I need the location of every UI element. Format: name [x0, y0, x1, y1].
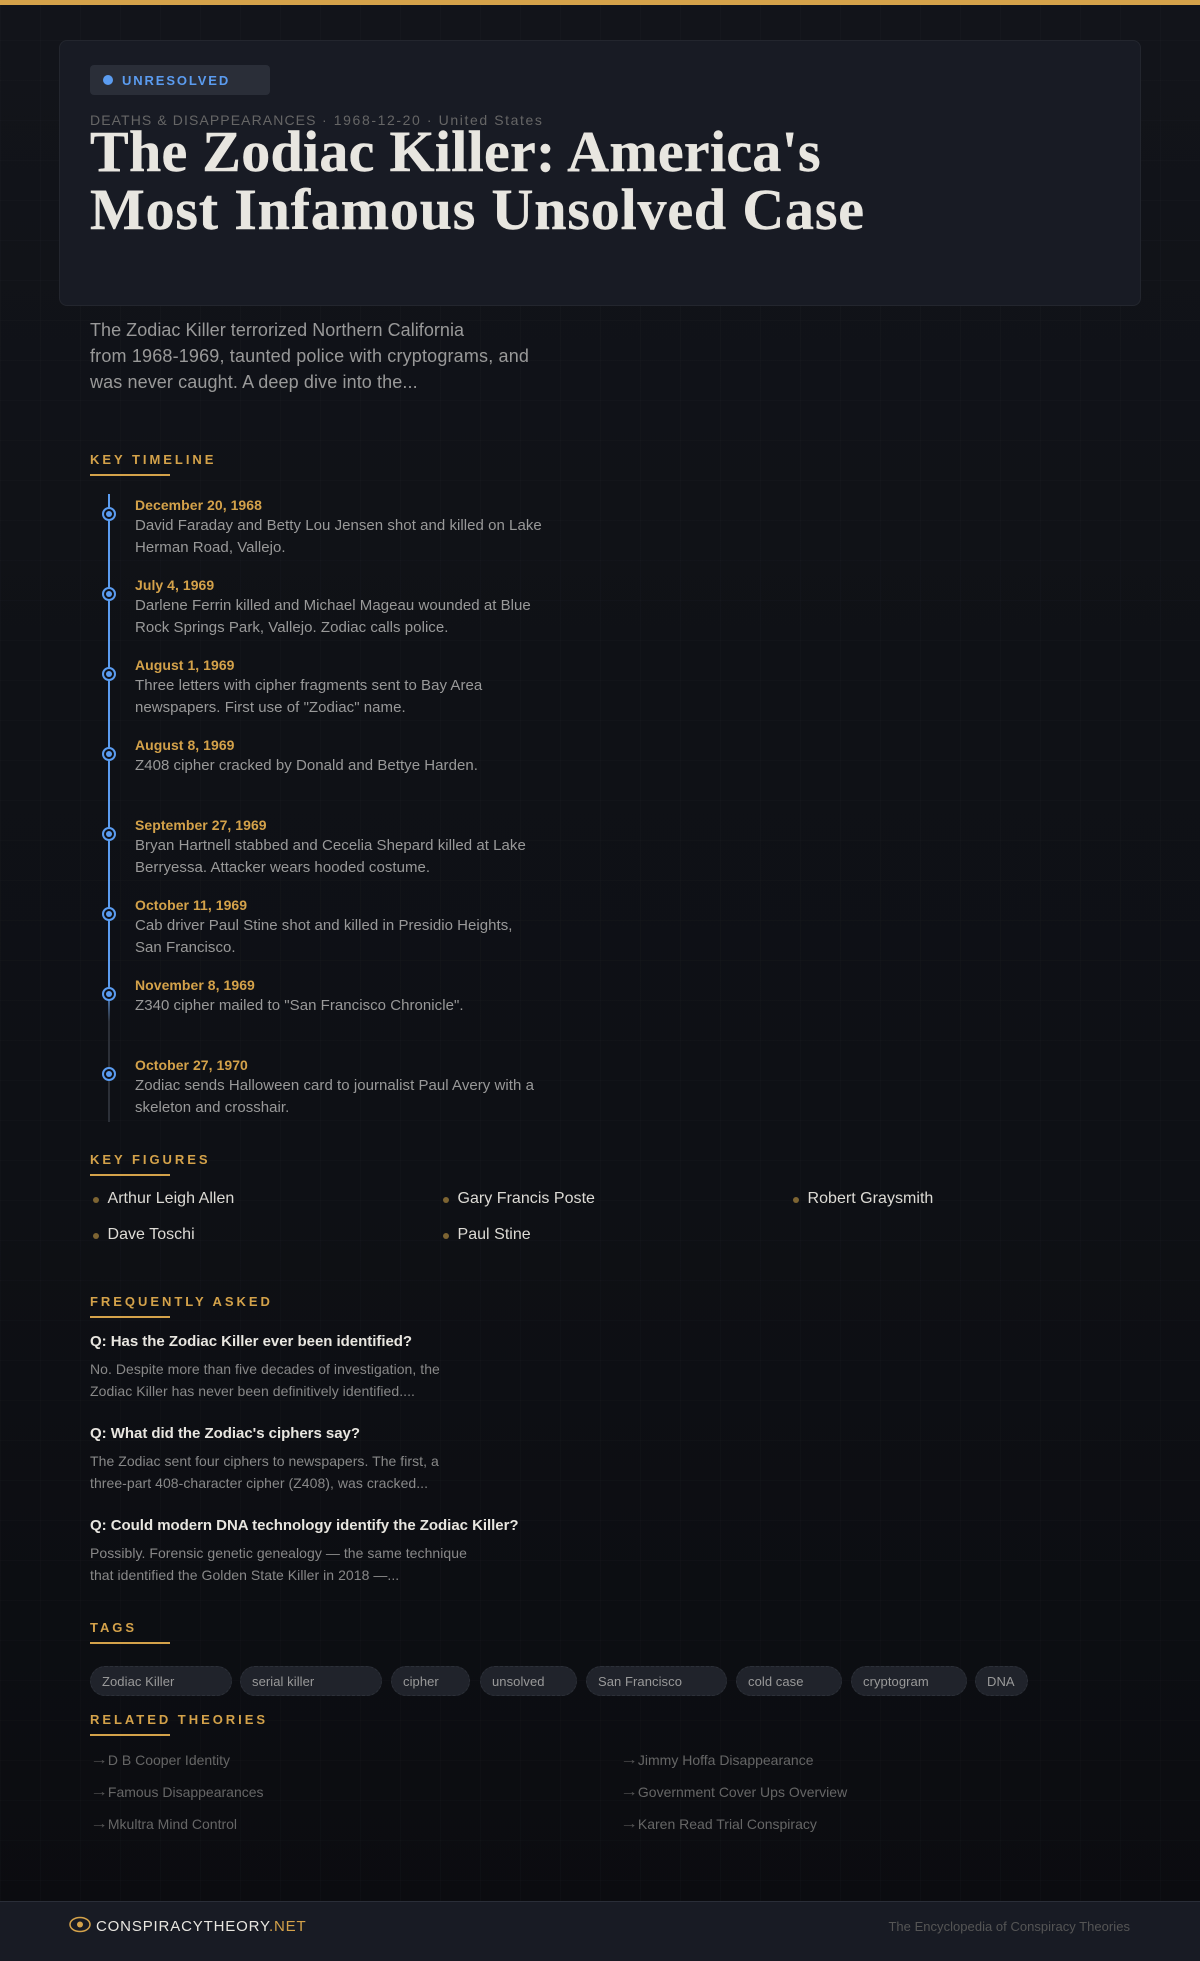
event: October 27, 1970: skeleton and crosshair.	[135, 1099, 289, 1116]
event: September 27, 1969: September 27, 1969	[135, 817, 267, 833]
event: December 20, 1968	[135, 497, 542, 556]
related link: →	[620, 1783, 638, 1799]
event: October 11, 1969: October 11, 1969	[135, 897, 247, 913]
tag: cold case	[748, 1674, 804, 1689]
marker 6	[102, 907, 116, 921]
title	[90, 119, 865, 242]
event: October 27, 1970	[135, 1057, 534, 1116]
category and date line: DEATHS & DISAPPEARANCES · 1968-12-20 · United States	[90, 112, 544, 128]
tag	[480, 1666, 577, 1696]
tag	[391, 1666, 470, 1696]
tag	[90, 1666, 232, 1696]
event: August 1, 1969	[135, 657, 482, 716]
tag	[240, 1666, 382, 1696]
footer	[0, 1901, 1200, 1961]
tag	[586, 1666, 727, 1696]
related link: →	[90, 1783, 108, 1799]
tag: unsolved	[492, 1674, 545, 1689]
icon: status dot	[103, 75, 113, 85]
event: August 1, 1969: Three letters with cipher fragments sent to Bay Area	[135, 677, 482, 694]
tag: DNA	[987, 1674, 1015, 1689]
related link: →	[620, 1815, 638, 1831]
event: August 1, 1969: August 1, 1969	[135, 657, 235, 673]
figure: Paul Stine: Paul Stine	[458, 1226, 531, 1242]
faq 1: Zodiac Killer has never been definitively identified....	[90, 1382, 415, 1398]
event: December 20, 1968: December 20, 1968	[135, 497, 262, 513]
tag	[736, 1666, 842, 1696]
event: October 11, 1969: Cab driver Paul Stine shot and killed in Presidio Heights,	[135, 917, 513, 934]
event: September 27, 1969	[135, 817, 526, 876]
event: September 27, 1969: Bryan Hartnell stabbed and Cecelia Shepard killed at Lake	[135, 837, 526, 854]
timeline spine	[108, 494, 110, 1122]
event: October 27, 1970: Zodiac sends Halloween card to journalist Paul Avery with a	[135, 1077, 534, 1094]
related link: →	[90, 1751, 108, 1767]
event: August 8, 1969	[135, 737, 478, 774]
marker 7	[102, 987, 116, 1001]
event: July 4, 1969: July 4, 1969	[135, 577, 214, 593]
faq 3: Q: Could modern DNA technology identify the Zodiac Killer?	[90, 1516, 519, 1534]
event: November 8, 1969: November 8, 1969	[135, 977, 255, 993]
heading: related theories: RELATED THEORIES	[90, 1712, 268, 1727]
marker 3	[102, 667, 116, 681]
status badge	[90, 65, 270, 95]
event: October 27, 1970: October 27, 1970	[135, 1057, 248, 1073]
panel: header card	[59, 40, 1141, 306]
event: November 8, 1969: Z340 cipher mailed to "San Francisco Chronicle".	[135, 997, 464, 1014]
related link: D B Cooper Identity	[108, 1752, 230, 1768]
tag: cryptogram	[863, 1674, 929, 1689]
event: August 8, 1969: August 8, 1969	[135, 737, 235, 753]
event: July 4, 1969: Rock Springs Park, Vallejo. Zodiac calls police.	[135, 619, 448, 636]
faq 2: The Zodiac sent four ciphers to newspapers. The first, a	[90, 1452, 439, 1468]
intro text	[90, 320, 529, 392]
timeline	[102, 494, 542, 1122]
tag: San Francisco	[598, 1674, 682, 1689]
related link: Famous Disappearances	[108, 1784, 264, 1800]
event: September 27, 1969: Berryessa. Attacker wears hooded costume.	[135, 859, 430, 876]
tag: cipher	[403, 1674, 439, 1689]
tag	[975, 1666, 1028, 1696]
heading: key figures: KEY FIGURES	[90, 1152, 211, 1167]
event: July 4, 1969: Darlene Ferrin killed and Michael Mageau wounded at Blue	[135, 597, 531, 614]
heading: frequently asked: FREQUENTLY ASKED	[90, 1294, 273, 1309]
faq 1: Q: Has the Zodiac Killer ever been identified?	[90, 1332, 412, 1350]
event: October 11, 1969: San Francisco.	[135, 939, 236, 956]
intro text: from 1968-1969, taunted police with cryptograms, and	[90, 346, 529, 366]
related link: Mkultra Mind Control	[108, 1816, 237, 1832]
event: August 8, 1969: Z408 cipher cracked by Donald and Bettye Harden.	[135, 757, 478, 774]
intro text: was never caught. A deep dive into the...	[90, 372, 418, 392]
faq 2: Q: What did the Zodiac's ciphers say?	[90, 1424, 360, 1442]
event: December 20, 1968: David Faraday and Betty Lou Jensen shot and killed on Lake	[135, 517, 542, 534]
figure: Arthur Leigh Allen: Arthur Leigh Allen	[108, 1190, 234, 1206]
related link: Karen Read Trial Conspiracy	[638, 1816, 817, 1832]
marker 1	[102, 507, 116, 521]
intro text: The Zodiac Killer terrorized Northern California	[90, 320, 464, 340]
related link: →	[90, 1815, 108, 1831]
icon: eye logo	[69, 1916, 91, 1932]
title: Most Infamous Unsolved Case	[90, 177, 865, 242]
faq 1	[90, 1332, 440, 1399]
marker 8	[102, 1067, 116, 1081]
event: November 8, 1969	[135, 977, 464, 1014]
faq 3	[90, 1516, 519, 1582]
logo text: CONSPIRACYTHEORY.NET	[96, 1918, 306, 1935]
heading: key timeline: KEY TIMELINE	[90, 452, 216, 467]
figure: Dave Toschi: Dave Toschi	[108, 1226, 195, 1242]
figure: Robert Graysmith: Robert Graysmith	[808, 1190, 933, 1206]
faq 2	[90, 1424, 439, 1491]
related link: →	[620, 1751, 638, 1767]
related link: Government Cover Ups Overview	[638, 1784, 847, 1800]
marker 2	[102, 587, 116, 601]
marker 5	[102, 827, 116, 841]
tag: serial killer	[252, 1674, 314, 1689]
faq 3: Possibly. Forensic genetic genealogy — the same technique	[90, 1544, 467, 1560]
marker 4	[102, 747, 116, 761]
title: The Zodiac Killer: America's	[90, 119, 821, 184]
heading: tags: TAGS	[90, 1620, 137, 1635]
badge label: UNRESOLVED	[122, 73, 230, 88]
figure: Gary Francis Poste: Gary Francis Poste	[458, 1190, 595, 1206]
event: October 11, 1969	[135, 897, 513, 956]
event: August 1, 1969: newspapers. First use of "Zodiac" name.	[135, 699, 406, 716]
event: July 4, 1969	[135, 577, 531, 636]
faq 3: that identified the Golden State Killer in 2018 —...	[90, 1566, 399, 1582]
tag: Zodiac Killer	[102, 1674, 174, 1689]
faq 2: three-part 408-character cipher (Z408), was cracked...	[90, 1474, 428, 1490]
related link: Jimmy Hoffa Disappearance	[638, 1752, 813, 1768]
event: December 20, 1968: Herman Road, Vallejo.	[135, 539, 286, 556]
faq 1: No. Despite more than five decades of investigation, the	[90, 1360, 440, 1376]
top accent bar	[0, 0, 1200, 5]
tagline: The Encyclopedia of Conspiracy Theories	[888, 1919, 1130, 1934]
tag	[851, 1666, 967, 1696]
